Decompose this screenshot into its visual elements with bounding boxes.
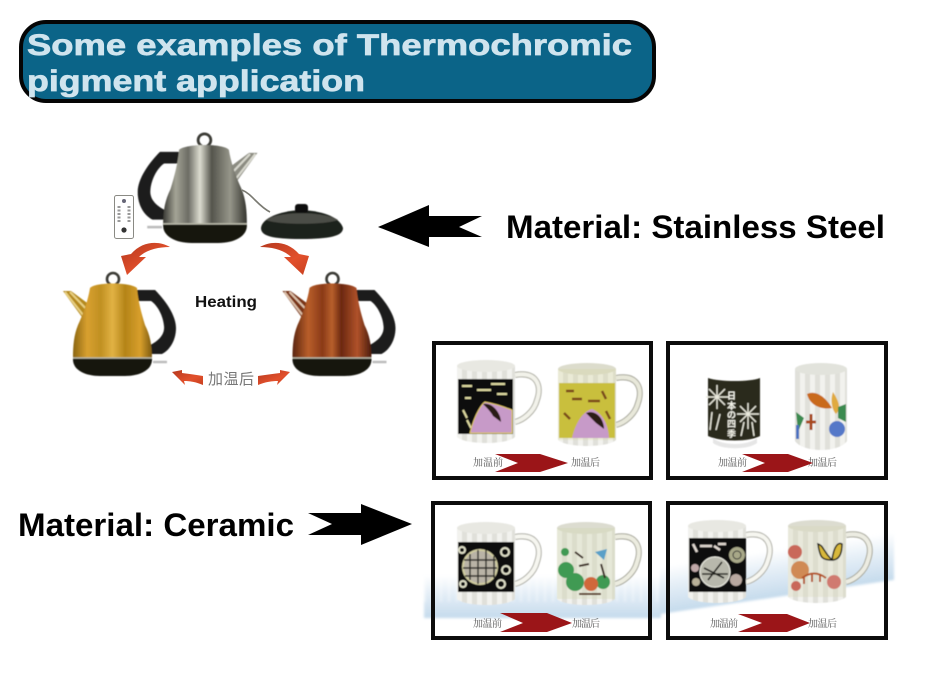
label: before heating: 加温前 (710, 617, 738, 630)
mug: dark before heating (457, 360, 539, 443)
label: after heating: 加温后 (208, 371, 254, 388)
arrow: pointing to kettles (378, 205, 482, 247)
mug: garden after heating (557, 522, 639, 605)
arrow: before to after (738, 614, 810, 632)
title banner (21, 22, 654, 101)
cup text: 四 (727, 419, 736, 429)
label: Heating: Heating (195, 294, 257, 311)
power cord (242, 190, 270, 212)
label: after heating: 加温后 (808, 456, 837, 469)
kettle: gold (63, 273, 176, 376)
kettle: stainless steel (138, 134, 257, 243)
arrow: before to after (742, 454, 813, 472)
mug: medallions before heating (688, 520, 770, 603)
small arrow left (172, 370, 203, 385)
kettle cycle illustration (63, 134, 396, 388)
cup: dark fireworks before heating (706, 378, 760, 448)
cup text: 季 (727, 428, 736, 439)
mug: round window before heating (457, 522, 539, 605)
cup text: 日 (727, 391, 736, 401)
label: after heating: 加温后 (571, 456, 600, 469)
arrow: before to after (500, 613, 572, 632)
panel: mug pair 1 (434, 343, 651, 478)
panel: mug pair 4 (668, 503, 886, 638)
panel: mug pair 2 (668, 343, 886, 478)
arrow: pointing to mugs (308, 504, 412, 545)
kettle: copper (282, 273, 396, 376)
label: before heating: 加温前 (718, 456, 747, 469)
arrow: to gold kettle (121, 243, 170, 275)
arrow: before to after (495, 454, 568, 472)
cup text: 本 (727, 400, 736, 411)
title text: Some examples of Thermochromic (27, 29, 632, 62)
label: after heating: 加温后 (572, 617, 600, 630)
arrow: to copper kettle (260, 243, 309, 275)
mug: butterfly after heating (788, 520, 870, 603)
label: Material Stainless Steel: Material: Stainless Steel (506, 209, 885, 245)
title text: pigment application (27, 65, 365, 98)
panel: mug pair 3 (433, 503, 650, 638)
kettle base (261, 204, 343, 239)
remote control (114, 196, 134, 238)
background band: pale blue wave (424, 532, 894, 618)
small arrow right (258, 370, 290, 385)
label: after heating: 加温后 (808, 617, 837, 630)
cup: goldfish after heating (795, 363, 847, 450)
label: before heating: 加温前 (473, 456, 503, 469)
cup text: の (727, 410, 736, 420)
label: Material Ceramic: Material: Ceramic (18, 507, 294, 543)
mug: yellow after heating (558, 363, 640, 446)
label: before heating: 加温前 (473, 617, 502, 630)
